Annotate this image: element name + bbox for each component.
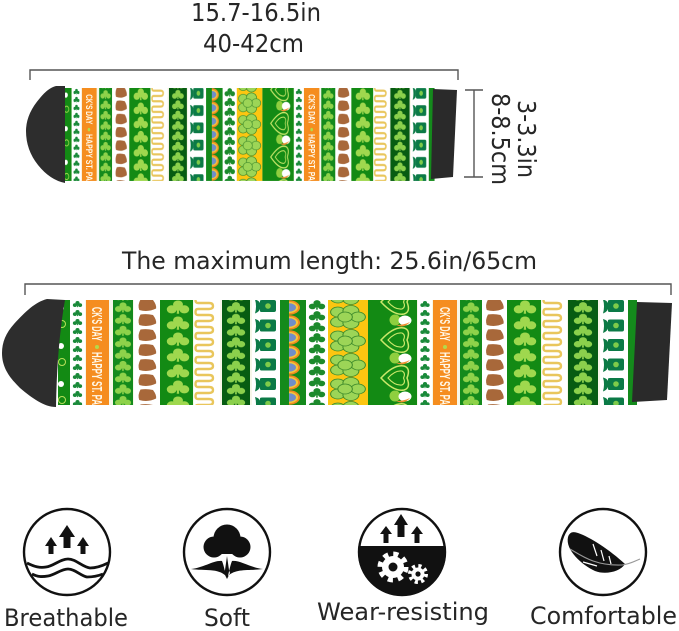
sock: fully stretched xyxy=(2,299,672,407)
dimension line: sock length xyxy=(30,70,458,80)
icon: comfortable feather xyxy=(560,509,646,595)
dimension line: sock width xyxy=(464,90,483,177)
label: sock width xyxy=(486,93,541,185)
dimension line: maximum length xyxy=(25,284,671,295)
heading: maximum length: The maximum length: 25.6in/65cm xyxy=(121,247,537,275)
heading: short sock length xyxy=(191,0,321,58)
icon: wear-resisting xyxy=(358,509,446,596)
sock: flat top view xyxy=(26,86,457,183)
icon: soft cotton xyxy=(184,509,270,595)
heading: short sock length: 40-42cm xyxy=(203,29,304,58)
label: sock width: 8-8.5cm xyxy=(486,93,515,185)
label: comfortable: Comfortable xyxy=(530,602,677,630)
icon: breathable xyxy=(24,509,110,595)
label: sock width: 3-3.3in xyxy=(512,100,541,178)
label: wear-resisting: Wear-resisting xyxy=(317,598,489,626)
